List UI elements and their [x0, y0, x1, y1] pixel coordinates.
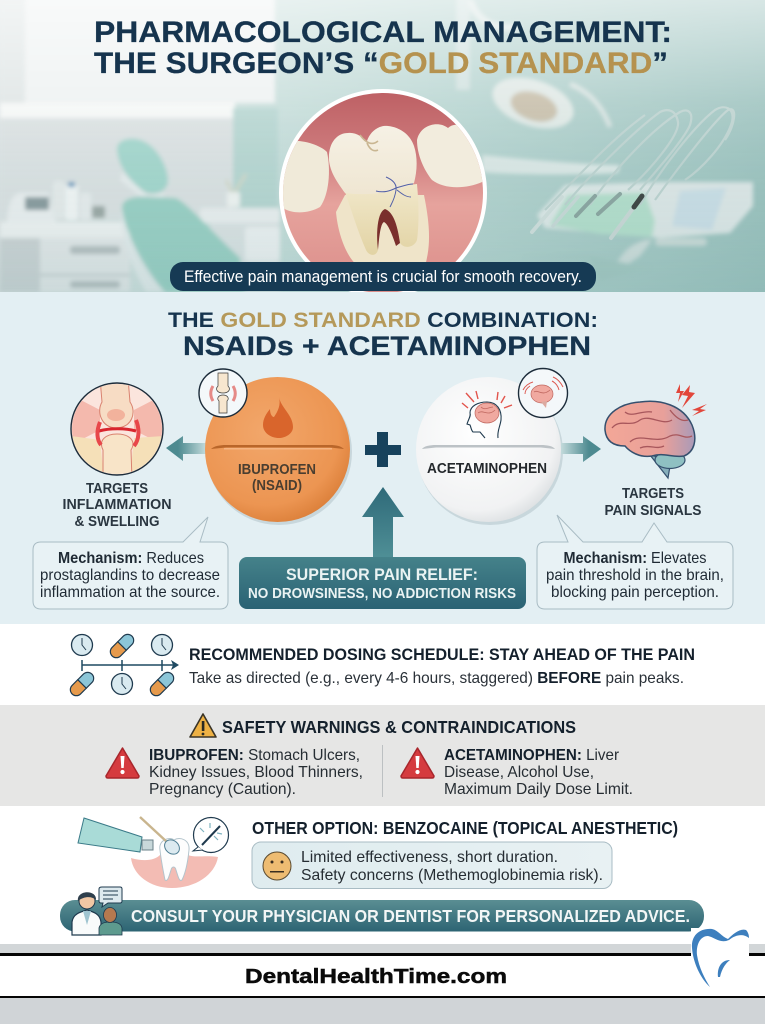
pill: acetaminophen: ACETAMINOPHEN — [427, 461, 547, 477]
banner: consult your physician: CONSULT YOUR PHYSICIAN OR DENTIST FOR PERSONALIZED ADVICE. — [131, 906, 690, 926]
callout: limitations box: Safety concerns (Methemoglobinemia risk). — [301, 867, 603, 884]
callout: superior pain relief: NO DROWSINESS, NO ADDICTION RISKS — [248, 586, 516, 602]
callout: limitations box — [252, 842, 612, 888]
callout: ibuprofen mechanism — [33, 517, 228, 609]
label: targets inflammation: & SWELLING — [74, 514, 160, 530]
title — [94, 16, 672, 80]
callout: acetaminophen mechanism: Mechanism: Elevates — [564, 550, 707, 567]
text: ibuprofen warnings: Pregnancy (Caution). — [149, 781, 296, 798]
pill: ibuprofen: (NSAID) — [252, 478, 302, 494]
text: ibuprofen warnings — [149, 747, 363, 798]
label: targets inflammation: TARGETS — [86, 481, 148, 497]
icon: flame — [263, 397, 293, 438]
icon: neutral face — [263, 852, 291, 880]
callout: ibuprofen mechanism: inflammation at the source. — [40, 584, 220, 601]
title: PHARMACOLOGICAL MANAGEMENT: — [94, 16, 672, 49]
text: ibuprofen warnings: Kidney Issues, Blood Thinners, — [149, 764, 363, 781]
root cavity — [377, 209, 400, 250]
panel: other option benzocaine — [0, 806, 765, 944]
text: acetaminophen warnings: ACETAMINOPHEN: Liver — [444, 747, 620, 764]
icon: red warning acetaminophen — [401, 748, 434, 778]
symbol: plus — [365, 432, 401, 467]
suture — [376, 177, 413, 207]
caption pill — [170, 262, 596, 291]
text: ibuprofen warnings: IBUPROFEN: Stomach Ulcers, — [149, 747, 360, 764]
callout: limitations box: Limited effectiveness, short duration. — [301, 849, 558, 866]
heading: combination: NSAIDs + ACETAMINOPHEN — [183, 331, 591, 361]
heading: combination — [168, 309, 598, 361]
bone around root — [336, 195, 429, 266]
heading: dosing: RECOMMENDED DOSING SCHEDULE: STAY AHEAD OF THE PAIN — [189, 645, 695, 664]
title: THE SURGEON’S “ GOLD STANDARD ” — [94, 47, 668, 80]
text: acetaminophen warnings: Maximum Daily Dose Limit. — [444, 781, 633, 798]
callout: acetaminophen mechanism — [537, 515, 733, 609]
banner: consult your physician — [60, 900, 704, 932]
callout: ibuprofen mechanism: Mechanism: Reduces — [58, 550, 204, 567]
arrow: to pain signals — [561, 436, 601, 462]
text: dosing directions: Take as directed (e.g., every 4-6 hours, staggered) BEFORE pain peaks. — [189, 670, 684, 687]
callout: superior pain relief: SUPERIOR PAIN RELIEF: — [286, 565, 478, 584]
caption pill: Effective pain management is crucial for smooth recovery. — [184, 268, 582, 286]
icon: inflamed joint — [71, 378, 163, 480]
crown — [329, 126, 417, 194]
icon: red warning ibuprofen — [106, 748, 139, 778]
footer: site name — [0, 953, 765, 998]
callout: acetaminophen mechanism: pain threshold in the brain, — [546, 567, 724, 584]
right neighbouring tooth — [417, 124, 490, 187]
label: targets inflammation: INFLAMMATION — [62, 497, 172, 513]
logo: tooth outline — [691, 928, 749, 996]
icon: joint badge — [199, 369, 247, 417]
text: acetaminophen warnings — [444, 747, 633, 798]
footer: site name: DentalHealthTime.com — [245, 965, 507, 988]
band: footer base — [0, 998, 765, 1024]
label: targets pain signals: TARGETS — [622, 486, 684, 502]
root — [345, 184, 418, 255]
heading: other option: OTHER OPTION: BENZOCAINE (TOPICAL ANESTHETIC) — [252, 818, 678, 838]
panel: gold standard combination — [0, 292, 765, 624]
icon: doctor and patient — [72, 887, 122, 935]
callout: acetaminophen mechanism: blocking pain perception. — [551, 584, 719, 601]
illustration: tooth close-up with suture — [279, 89, 490, 299]
heading: combination: THE GOLD STANDARD COMBINATION: — [168, 309, 598, 332]
icon: brain with lightning — [605, 384, 707, 478]
label: targets inflammation — [62, 481, 172, 530]
panel: hero clinic photo — [0, 0, 765, 292]
arrow: combined effect up — [362, 487, 404, 558]
pill: acetaminophen — [416, 377, 563, 525]
icon: brain badge — [518, 368, 568, 418]
icon: topical gel and tooth — [78, 817, 228, 888]
pill: ibuprofen: IBUPROFEN — [238, 462, 316, 478]
label: targets pain signals — [604, 486, 702, 519]
panel: dosing schedule — [0, 624, 765, 705]
icon: yellow warning — [190, 714, 216, 737]
band: grey separator — [0, 944, 765, 954]
callout: ibuprofen mechanism: prostaglandins to decrease — [40, 567, 220, 584]
panel: safety warnings — [0, 705, 765, 806]
icon: dosing timeline — [68, 632, 179, 698]
pill: ibuprofen — [205, 377, 352, 525]
left neighbouring tooth — [283, 141, 329, 212]
text: acetaminophen warnings: Disease, Alcohol Use, — [444, 764, 594, 781]
label: targets pain signals: PAIN SIGNALS — [604, 503, 702, 519]
callout: superior pain relief — [239, 557, 526, 609]
heading: safety: SAFETY WARNINGS & CONTRAINDICATIONS — [222, 717, 576, 737]
arrow: to inflammation — [166, 436, 206, 461]
bone ridge between roots — [379, 223, 398, 262]
icon: head with brain — [462, 391, 512, 438]
